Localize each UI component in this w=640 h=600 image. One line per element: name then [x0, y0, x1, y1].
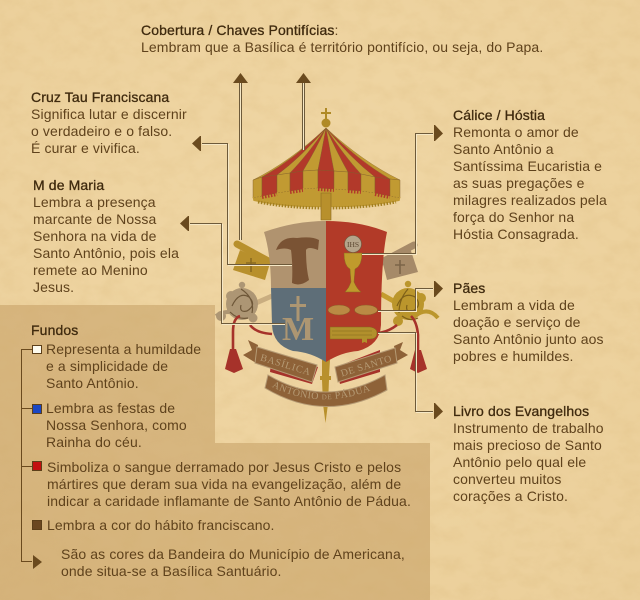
swatch: red — [32, 462, 42, 470]
text: calice: força do Senhor na — [453, 209, 574, 225]
text: calice: Santíssima Eucaristia e — [453, 158, 602, 174]
legend text: white: Representa a humildade — [46, 341, 201, 357]
text: paes: doação e serviço de — [453, 314, 581, 330]
connector: M de Maria — [180, 216, 285, 324]
text: calice: Remonta o amor de — [453, 124, 579, 140]
ribbon text lower: ANTÔNIO DE PÁDUA — [272, 382, 370, 400]
book — [330, 327, 377, 343]
text: livro — [453, 403, 604, 504]
connector: book — [378, 332, 443, 419]
text: cruz tau: o verdadeiro e o falso. — [31, 123, 172, 139]
quarter: red — [326, 221, 387, 362]
text: M de Maria: Santo Antônio, pois ela — [33, 245, 179, 261]
text: paes — [453, 280, 604, 364]
IHS medallion: IHS — [347, 240, 359, 249]
ribbon text right: DE SANTO — [339, 353, 393, 379]
IHS medallion — [344, 236, 362, 252]
text: livro: mais precioso de Santo — [453, 437, 602, 453]
breads — [328, 305, 378, 315]
canopy valance — [253, 170, 400, 198]
text: M de Maria: remete ao Menino — [33, 262, 148, 278]
text: cruz tau: Cruz Tau Franciscana — [31, 89, 169, 105]
text: livro: converteu muitos — [453, 471, 562, 487]
tau cross — [276, 237, 319, 284]
legend text: white: e a simplicidade de — [46, 358, 168, 374]
canopy stripes — [253, 128, 400, 180]
legend text: flag: onde situa-se a Basílica Santuário. — [61, 563, 282, 579]
text: livro: Livro dos Evangelhos — [453, 403, 589, 419]
quarter: blue — [271, 288, 326, 362]
canopy pole — [321, 193, 331, 220]
legend text: brown: Lembra a cor do hábito franciscano. — [47, 517, 275, 533]
canopy finial — [321, 108, 331, 128]
legend text: red: mártires que deram sua vida na evangelização, além de — [47, 476, 401, 492]
valance fringe — [253, 189, 400, 199]
text: M de Maria — [33, 177, 179, 295]
connector: tau cross — [192, 136, 292, 266]
text: livro: corações a Cristo. — [453, 488, 568, 504]
text: cruz tau: É curar e vivifica. — [31, 140, 140, 156]
text: paes: Pães — [453, 280, 485, 296]
text: livro: Antônio pelo qual ele — [453, 454, 586, 470]
swatch: brown — [32, 520, 42, 530]
text: cobertura: Cobertura / Chaves Pontifícias: — [141, 22, 338, 38]
canopy — [253, 108, 400, 220]
cross and M: M — [282, 311, 314, 348]
legend text: red: Simboliza o sangue derramado por Jesus Cristo e pelos — [47, 459, 401, 475]
connector: chalice — [362, 125, 443, 254]
legend text: white — [46, 341, 201, 391]
quarter: tan — [264, 221, 326, 288]
text: cobertura: Lembram que a Basílica é território pontifício, ou seja, do Papa. — [141, 39, 543, 55]
text: cruz tau — [31, 89, 187, 156]
chalice — [344, 253, 362, 292]
text: cruz tau: Significa lutar e discernir — [31, 106, 187, 122]
text: M de Maria: marcante de Nossa — [33, 211, 156, 227]
text: calice: Santo Antônio a — [453, 141, 554, 157]
legend text: red — [47, 459, 411, 509]
motto ribbons — [243, 340, 408, 407]
text: paes: Lembram a vida de — [453, 297, 575, 313]
legend text: red: indicar a caridade inflamante de Santo Antônio de Pádua. — [47, 493, 411, 509]
legend text: blue: Lembra as festas de — [46, 400, 175, 416]
crossed keys — [233, 244, 418, 303]
legend text: flag — [61, 546, 405, 579]
legend arrow — [33, 555, 42, 569]
darker legend panel — [0, 305, 430, 600]
legend text: blue: Nossa Senhora, como — [46, 417, 187, 433]
text: paes: Santo Antônio junto aos — [453, 331, 604, 347]
text: M de Maria: Senhora na vida de — [33, 228, 157, 244]
connector: keys up 1 — [233, 73, 248, 240]
text: calice: Hóstia Consagrada. — [453, 226, 579, 242]
text: calice — [453, 107, 607, 242]
legend heading: Fundos — [31, 322, 78, 338]
legend text: blue: Rainha do céu. — [46, 434, 142, 450]
text: M de Maria: M de Maria — [33, 177, 104, 193]
text: cobertura — [141, 22, 543, 55]
red cords and tassels — [225, 316, 427, 373]
gold lower skirt — [254, 188, 399, 207]
connector: breads — [378, 281, 443, 312]
legend connector tree — [22, 350, 32, 562]
ornate key bow left — [216, 282, 258, 322]
legend text: blue — [46, 400, 187, 450]
swatch: white — [32, 346, 42, 354]
text: paes: pobres e humildes. — [453, 348, 573, 364]
text: M de Maria: Jesus. — [33, 279, 74, 295]
ribbon text left: BASÍLICA — [259, 352, 313, 378]
legend text: flag: São as cores da Bandeira do Município de Americana, — [61, 546, 405, 562]
text: livro: Instrumento de trabalho — [453, 420, 604, 436]
ornate key bow right — [392, 281, 438, 326]
text: M de Maria: Lembra a presença — [33, 194, 156, 210]
legend text: white: Santo Antônio. — [46, 375, 139, 391]
sword below shield — [320, 360, 331, 423]
text: calice: milagres realizados pela — [453, 192, 607, 208]
connector: keys up 2 — [296, 73, 311, 150]
shield — [264, 221, 387, 362]
swatch: blue — [32, 404, 42, 414]
text: calice: Cálice / Hóstia — [453, 107, 545, 123]
text: calice: as suas pregações e — [453, 175, 584, 191]
